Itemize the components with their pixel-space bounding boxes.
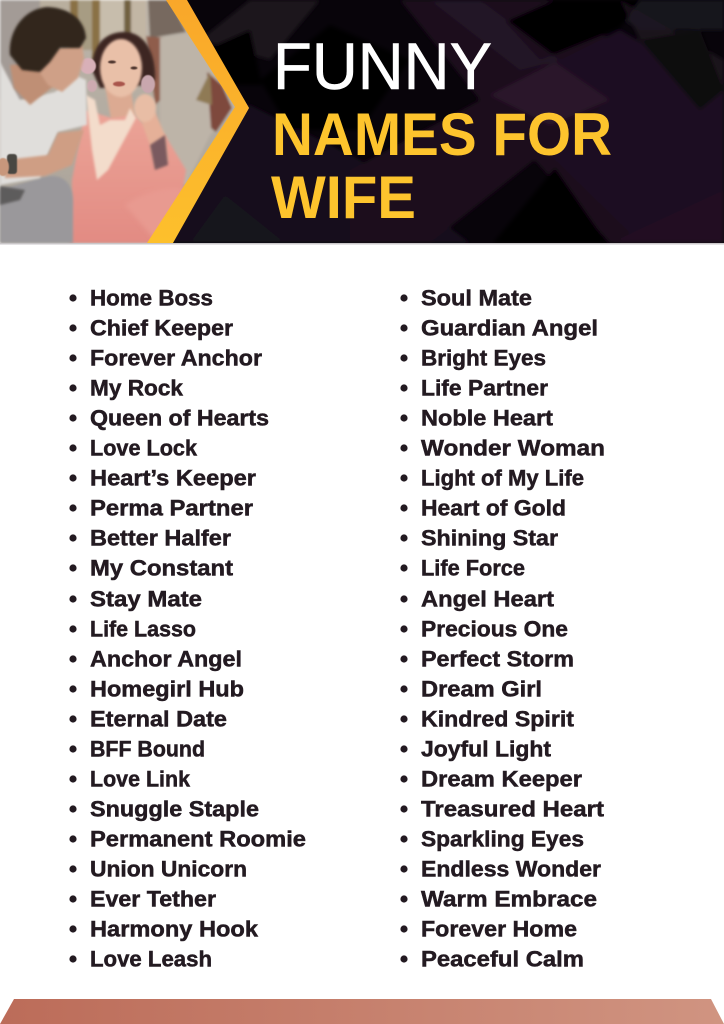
list: left column: Perma Partner	[90, 496, 253, 520]
list: left column: Heart’s Keeper	[90, 466, 256, 490]
list: left column: Union Unicorn	[90, 856, 247, 882]
woman: hand	[134, 94, 156, 122]
list: right column: Sparkling Eyes	[421, 826, 584, 852]
woman: curlers	[80, 58, 155, 93]
list: right column: Kindred Spirit	[421, 706, 575, 732]
photo: couple on a sofa	[0, 0, 240, 243]
woman: robe collar	[86, 95, 136, 180]
list: right column: Forever Home	[421, 916, 577, 942]
woman: robe skirt shade	[134, 208, 168, 235]
list: right column: Peaceful Calm	[421, 946, 584, 972]
list: left column: Love Leash	[90, 946, 212, 972]
list: right column: Precious One	[421, 616, 568, 642]
list: left column: Love Lock	[90, 436, 198, 460]
man: face	[38, 45, 84, 92]
woman: raised arm	[142, 112, 166, 144]
list: right column: Dream Girl	[421, 676, 542, 702]
list: right column: Heart of Gold	[421, 496, 566, 520]
list: right column	[400, 286, 605, 972]
list: right column: Life Partner	[421, 376, 548, 400]
title line: wife: WIFE	[271, 164, 416, 231]
woman: face	[100, 39, 142, 97]
title line: names for: NAMES FOR	[272, 101, 612, 168]
list: right column: Light of My Life	[421, 466, 584, 490]
title line: funny: FUNNY	[273, 29, 492, 103]
woman: sleeve cuff	[150, 135, 168, 170]
list: left column: Home Boss	[90, 286, 213, 310]
list: left column: Anchor Angel	[90, 646, 242, 672]
footer band	[0, 999, 724, 1024]
list: left column: Better Halfer	[90, 526, 231, 550]
list: left column: Eternal Date	[90, 706, 227, 732]
list: left column: Snuggle Staple	[90, 796, 259, 822]
dark geometric background	[160, 0, 724, 243]
list: right column: Joyful Light	[421, 736, 552, 762]
list: right column: Treasured Heart	[421, 796, 605, 822]
list: left column: Chief Keeper	[90, 316, 233, 340]
gold chevron	[147, 0, 249, 243]
list: left column: Permanent Roomie	[90, 826, 306, 852]
man: neck	[10, 62, 55, 105]
man: grey trousers	[0, 176, 73, 243]
list: right column: Warm Embrace	[421, 886, 597, 912]
list: left column: My Rock	[90, 376, 184, 400]
man: trouser shadow	[0, 186, 25, 205]
title	[271, 29, 612, 231]
list: left column: Ever Tether	[90, 886, 216, 912]
man: watch	[7, 154, 17, 174]
list: right column: Noble Heart	[421, 406, 554, 430]
list: left column: Love Link	[90, 766, 191, 792]
list: left column: My Constant	[90, 556, 234, 580]
woman: eyes and lips	[108, 60, 138, 86]
list: right column: Endless Wonder	[421, 856, 601, 882]
list: right column: Life Force	[421, 556, 525, 580]
man: forearm	[5, 130, 84, 178]
list: left column	[69, 286, 306, 972]
list: right column: Wonder Woman	[421, 436, 605, 460]
list: left column: Life Lasso	[90, 616, 196, 642]
list: right column: Soul Mate	[421, 286, 532, 310]
list: right column: Guardian Angel	[421, 316, 598, 340]
man: white t-shirt	[0, 62, 87, 185]
woman: neck	[104, 85, 134, 118]
list: right column: Bright Eyes	[421, 346, 546, 370]
list: left column: BFF Bound	[90, 736, 205, 762]
header banner	[0, 0, 724, 243]
list: right column: Perfect Storm	[421, 646, 574, 672]
list: left column: Harmony Hook	[90, 916, 259, 942]
list: right column: Angel Heart	[421, 586, 555, 612]
list: right column: Dream Keeper	[421, 766, 582, 792]
list: left column: Queen of Hearts	[90, 406, 269, 430]
list: left column: Forever Anchor	[90, 346, 262, 370]
list: left column: Stay Mate	[90, 586, 202, 612]
photo backdrop	[0, 0, 240, 243]
woman: pink robe	[70, 110, 186, 243]
man: dark hair	[10, 7, 86, 72]
list: left column: Homegirl Hub	[90, 676, 244, 702]
man: hand	[0, 158, 9, 176]
list: right column: Shining Star	[421, 526, 558, 550]
woman: hair	[92, 32, 155, 88]
